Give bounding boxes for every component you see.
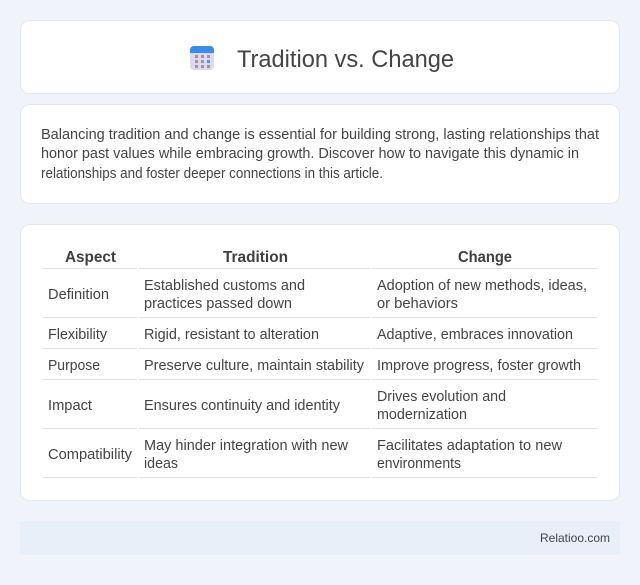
- title: Tradition vs. Change: [237, 46, 454, 73]
- table header: Aspect: [65, 249, 116, 266]
- row: compatibility: Facilitates adaptation to new: [377, 438, 563, 454]
- row: flexibility: [48, 327, 573, 343]
- row: compatibility: [48, 438, 563, 472]
- row: impact: Impact: [48, 398, 92, 414]
- row: flexibility: Rigid, resistant to alteration: [144, 327, 319, 343]
- footer: [20, 521, 620, 555]
- table header: Tradition: [223, 249, 288, 266]
- row: purpose: Preserve culture, maintain stability: [144, 358, 365, 374]
- row: compatibility: May hinder integration with new: [144, 438, 349, 454]
- row: definition: [48, 278, 587, 312]
- row: purpose: Purpose: [48, 358, 100, 374]
- row: definition: practices passed down: [144, 296, 292, 312]
- row: flexibility: Adaptive, embraces innovation: [377, 327, 573, 343]
- icon: calendar: [190, 46, 214, 70]
- row: purpose: [48, 358, 581, 374]
- row: definition: Definition: [48, 287, 109, 303]
- text block: introduction: relationships and foster deeper connections in this article.: [41, 166, 383, 182]
- row: compatibility: ideas: [144, 456, 178, 472]
- table header: Change: [458, 249, 512, 266]
- row: definition: or behaviors: [377, 296, 458, 312]
- text block: introduction: [41, 127, 599, 182]
- row: compatibility: Compatibility: [48, 447, 133, 463]
- row: definition: Established customs and: [144, 278, 305, 294]
- row: impact: Ensures continuity and identity: [144, 398, 341, 414]
- panel: title card: [20, 20, 620, 94]
- row: compatibility: environments: [377, 456, 461, 472]
- row: purpose: Improve progress, foster growth: [377, 358, 581, 374]
- text block: introduction: Balancing tradition and change is essential for building strong, lasting relationships that: [41, 127, 599, 143]
- row: impact: [48, 389, 506, 423]
- row: flexibility: Flexibility: [48, 327, 108, 343]
- footer credit: Relatioo.com: [540, 531, 610, 545]
- text block: introduction: honor past values while embracing growth. Discover how to navigate this dynamic in: [41, 146, 579, 162]
- panel: comparison table: [20, 224, 620, 500]
- row: impact: Drives evolution and: [377, 389, 506, 405]
- row: definition: Adoption of new methods, ideas,: [377, 278, 587, 294]
- row: impact: modernization: [377, 407, 467, 423]
- panel: introduction: [20, 104, 620, 204]
- table header: [65, 249, 512, 266]
